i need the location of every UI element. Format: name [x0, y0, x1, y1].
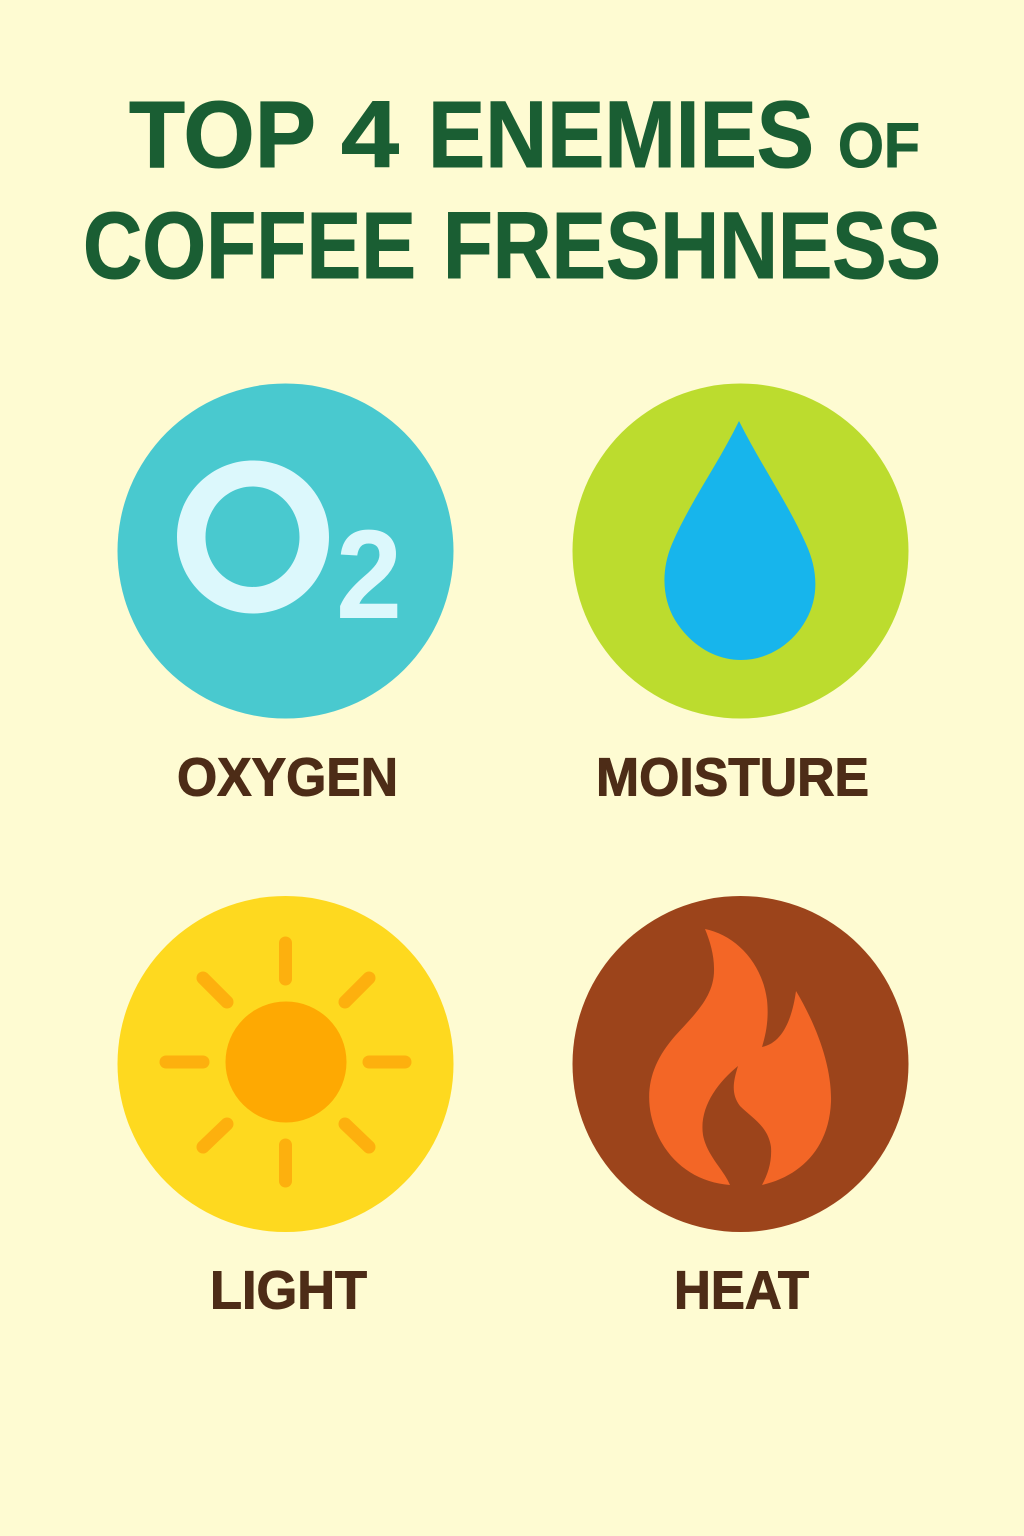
- title: COFFEE: [83, 193, 416, 299]
- icon: O2 symbol: 2: [336, 504, 402, 645]
- icon: O2 symbol: [177, 460, 402, 645]
- label: heat: HEAT: [674, 1260, 809, 1320]
- panel: heat: [572, 896, 908, 1320]
- panel: light: [118, 896, 454, 1320]
- icon: water drop: [664, 421, 815, 660]
- label: light: LIGHT: [210, 1260, 367, 1320]
- panel: moisture: [572, 384, 908, 808]
- label: moisture: MOISTURE: [596, 748, 869, 808]
- label: oxygen: OXYGEN: [177, 748, 398, 808]
- icon: sun: [166, 943, 405, 1181]
- icon: moisture circle: [572, 384, 908, 718]
- title: OF: [838, 111, 920, 181]
- title: ENEMIES: [428, 82, 814, 188]
- icon: flame: [649, 929, 831, 1185]
- title: [83, 82, 941, 299]
- title: 4: [341, 82, 399, 188]
- icon: oxygen circle: [118, 384, 454, 718]
- icon: light circle: [118, 896, 454, 1232]
- title: TOP: [129, 82, 316, 188]
- panel: oxygen: [118, 384, 454, 808]
- icon: heat circle: [572, 896, 908, 1232]
- title: FRESHNESS: [443, 193, 941, 299]
